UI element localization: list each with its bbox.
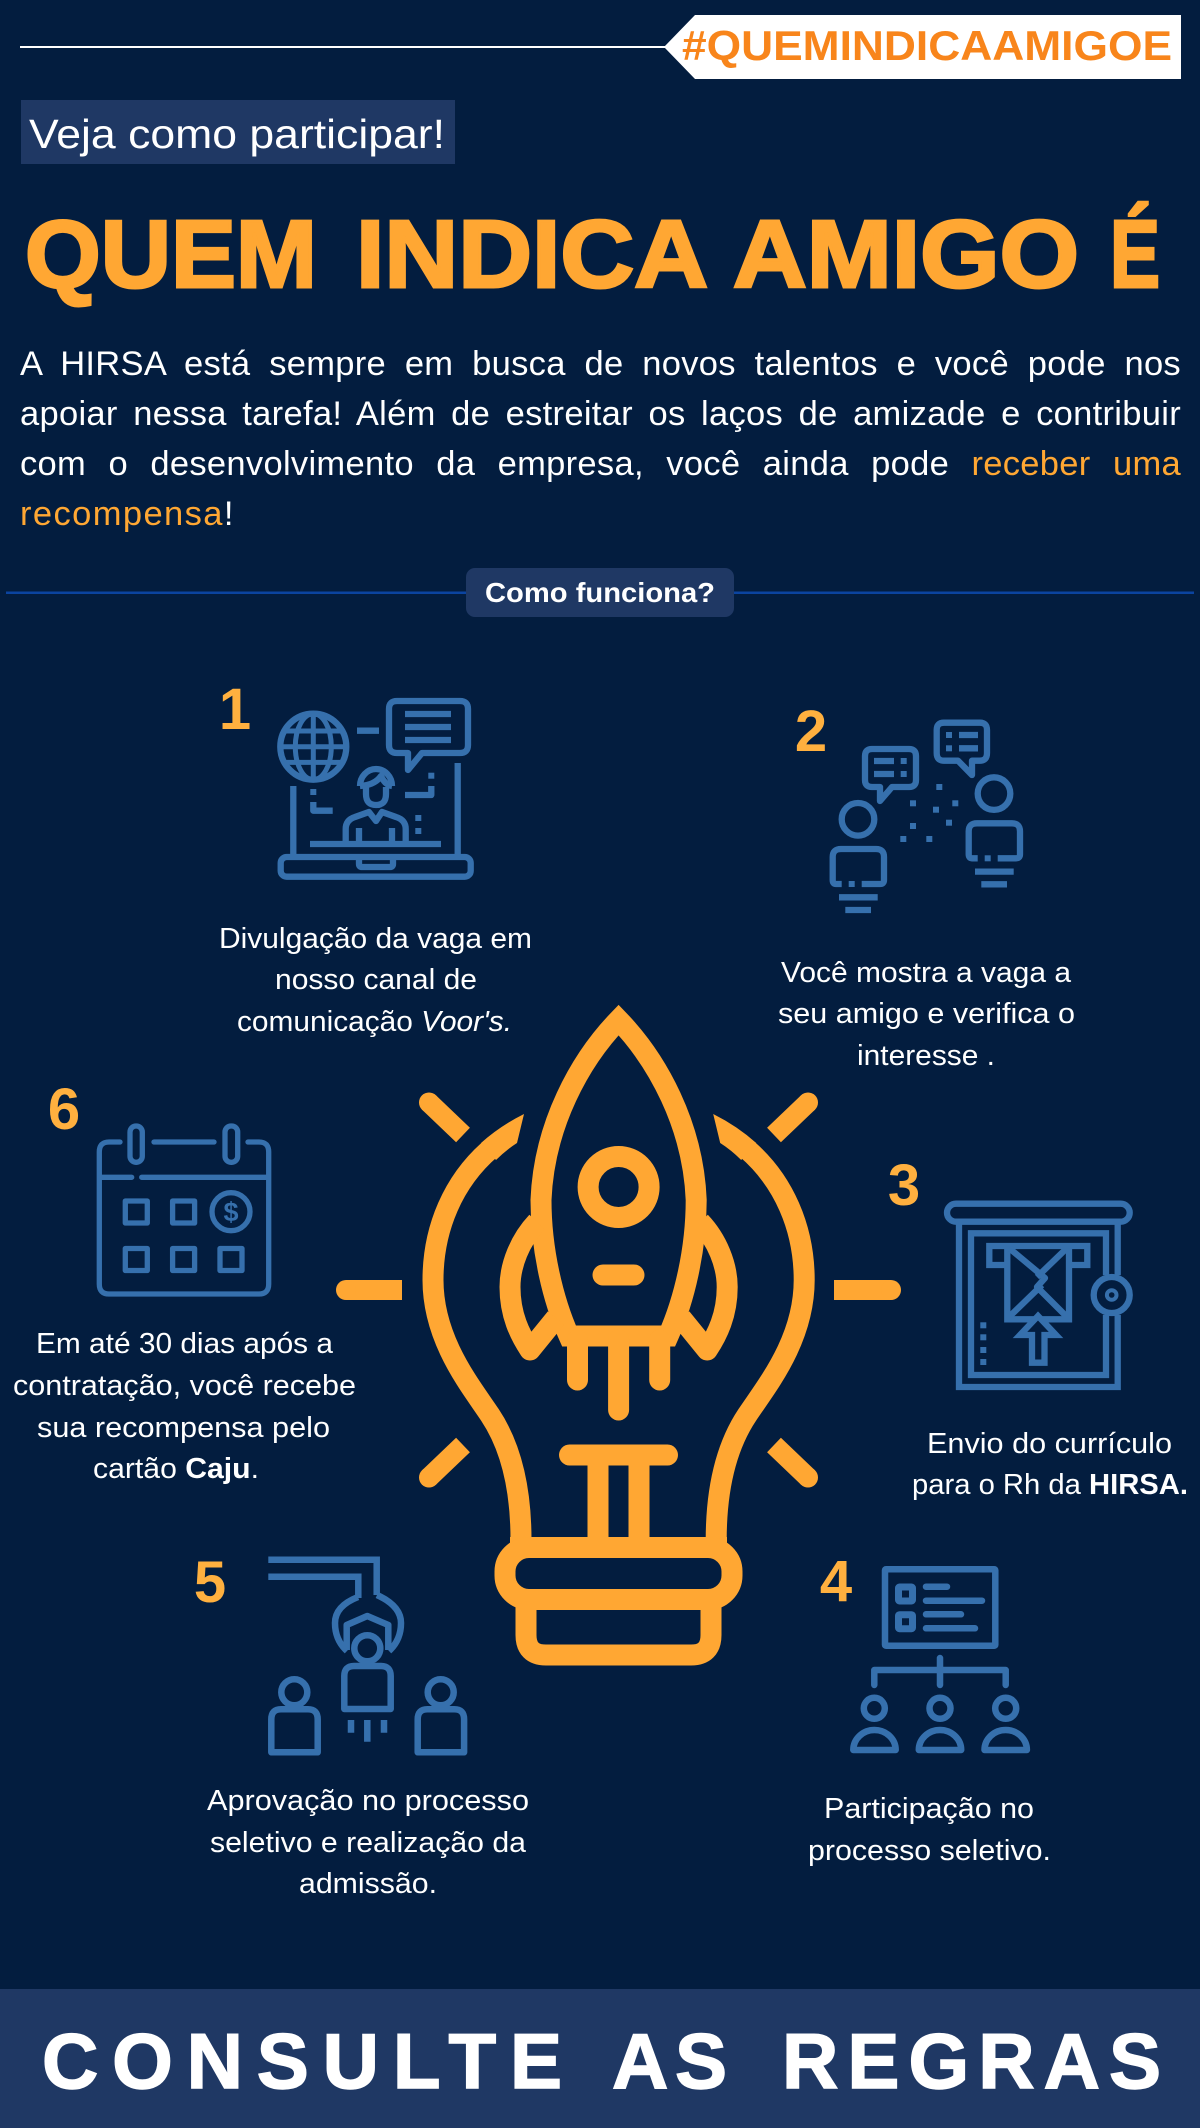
intro paragraph <box>20 345 1181 533</box>
step 4 caption: processo seletivo. <box>808 1835 1051 1867</box>
step 6 number: 6 <box>48 1077 80 1142</box>
title: INDICA <box>356 201 708 308</box>
bulb outline <box>433 1114 804 1540</box>
footer banner: consulte as regras: CONSULTE <box>42 2017 562 2105</box>
step 5 caption: admissão. <box>299 1868 437 1900</box>
bulb base <box>505 1455 732 1655</box>
step 6 caption: sua recompensa pelo <box>37 1412 330 1444</box>
step 1 caption: comunicação Voor's. <box>237 1006 512 1038</box>
step 6 <box>13 1077 356 1485</box>
icon: laptop with person, globe and speech bubble <box>280 701 471 877</box>
step 4 caption: Participação no <box>824 1793 1034 1825</box>
footer banner: consulte as regras <box>0 1989 1200 2128</box>
step 2 <box>778 699 1075 1072</box>
step 3 caption <box>912 1428 1188 1501</box>
central illustration: rocket inside light bulb <box>336 1020 901 1655</box>
step 2 caption <box>778 957 1075 1072</box>
step 2 caption: Você mostra a vaga a <box>781 957 1072 989</box>
footer banner: consulte as regras: REGRAS <box>782 2017 1161 2105</box>
icon: claw selecting a candidate <box>268 1560 464 1752</box>
step 2 caption: seu amigo e verifica o <box>778 998 1075 1030</box>
hashtag banner <box>20 15 1181 79</box>
step 3 caption: para o Rh da HIRSA. <box>912 1469 1188 1501</box>
step 5 caption: seletivo e realização da <box>210 1827 527 1859</box>
step 4 <box>808 1549 1051 1867</box>
step 1 number: 1 <box>219 677 251 742</box>
step 5 number: 5 <box>194 1550 226 1615</box>
title: AMIGO <box>733 201 1079 308</box>
icon: calendar with dollar coin: $ <box>223 1197 239 1227</box>
light rays <box>336 1092 901 1488</box>
step 1 <box>219 677 532 1038</box>
step 2 caption: interesse . <box>857 1040 995 1072</box>
step 1 caption <box>219 923 532 1038</box>
intro paragraph: com o desenvolvimento da empresa, você ainda pode receber uma <box>20 445 1181 483</box>
step 1 caption: Divulgação da vaga em <box>219 923 532 955</box>
icon: two people chatting <box>833 723 1020 910</box>
subtitle tag: Veja como participar! <box>29 111 445 157</box>
step 6 caption: contratação, você recebe <box>13 1370 356 1402</box>
icon: calendar with dollar coin <box>99 1126 269 1294</box>
rocket <box>510 1020 727 1410</box>
title: É <box>1110 201 1160 308</box>
intro paragraph: apoiar nessa tarefa! Além de estreitar os laços de amizade e contribuir <box>20 395 1181 433</box>
subtitle tag <box>21 100 455 164</box>
step 3 <box>888 1153 1188 1501</box>
step 3 caption: Envio do currículo <box>927 1428 1172 1460</box>
step 6 caption <box>13 1328 356 1485</box>
step 3 number: 3 <box>888 1153 920 1218</box>
step 1 caption: nosso canal de <box>275 964 477 996</box>
title <box>25 201 1160 308</box>
intro paragraph: recompensa! <box>20 495 235 533</box>
footer banner: consulte as regras: AS <box>612 2017 727 2105</box>
step 2 number: 2 <box>795 699 827 764</box>
step 4 number: 4 <box>820 1549 852 1614</box>
section divider: como funciona <box>6 568 1194 617</box>
step 6 caption: Em até 30 dias após a <box>36 1328 334 1360</box>
icon: resume into mailbox slot <box>947 1204 1130 1387</box>
intro paragraph: A HIRSA está sempre em busca de novos talentos e você pode nos <box>20 345 1181 383</box>
step 6 caption: cartão Caju. <box>93 1453 259 1485</box>
section divider: como funciona: Como funciona? <box>485 577 715 608</box>
icon: job board and three candidates <box>853 1569 1027 1750</box>
step 5 caption <box>207 1785 529 1900</box>
step 5 caption: Aprovação no processo <box>207 1785 529 1817</box>
title: QUEM <box>25 201 317 308</box>
step 5 <box>194 1550 529 1900</box>
step 4 caption <box>808 1793 1051 1867</box>
hashtag banner: #QUEMINDICAAMIGOE <box>682 22 1172 69</box>
